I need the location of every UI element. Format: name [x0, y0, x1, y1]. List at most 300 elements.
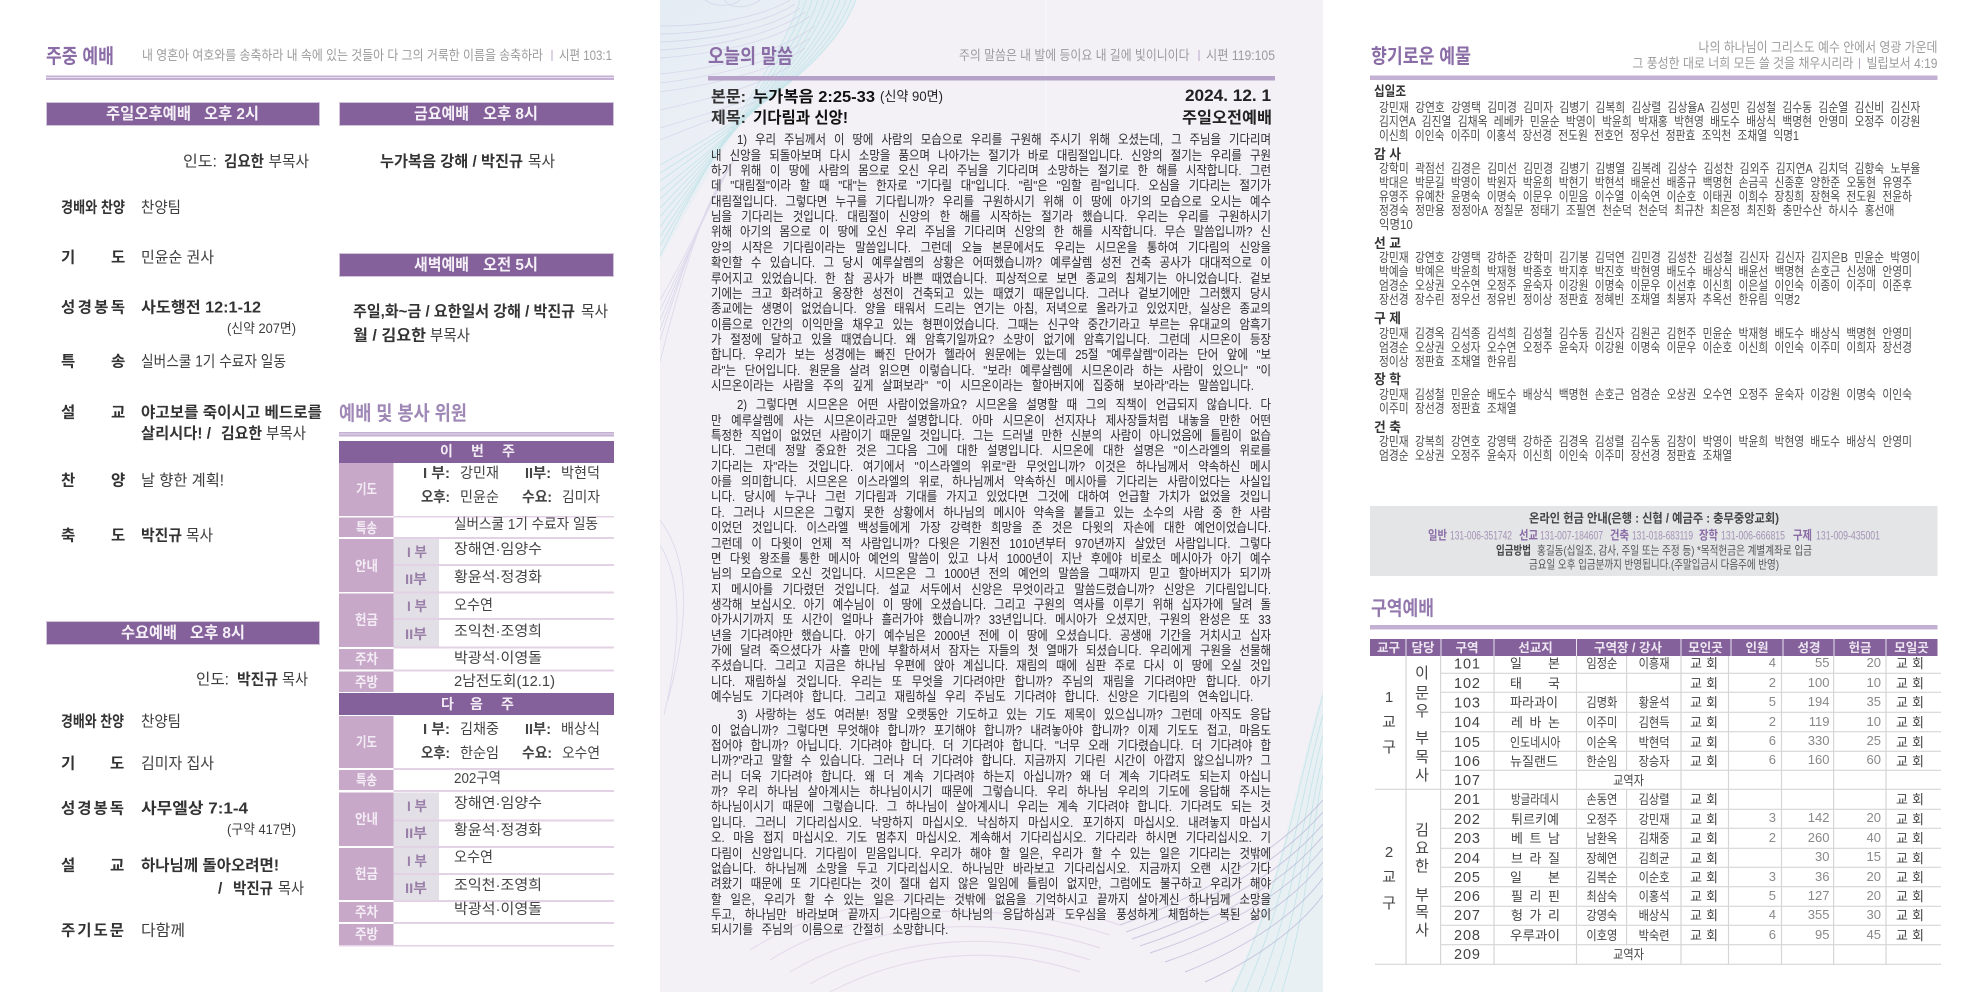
offering list: 선교: 장선경 장수린 정우선 정유빈 정이상 정판효 정혜빈 조채열 최봉자 추옥선 한유림 익명2: [1379, 292, 1800, 307]
bar: 수요예배: 오후 8시: [190, 624, 245, 642]
paragraph 3: 까? 우리 하나님 살아계시는 하나님이시기 때문에 그렇습니다. 우리 하나님 우리의 기도에 응답해 주시는: [711, 784, 1271, 799]
table rows: district 1: 107: [1454, 773, 1480, 789]
table rows: district 2: 206: [1454, 889, 1480, 905]
callout: online offering accounts: 온라인 헌금 안내(은행 : 신협 / 예금주 : 충무중앙교회): [1529, 510, 1779, 526]
table rows: district 2: 교회: [1896, 908, 1924, 923]
table rows: district 1: 이흥재: [1639, 656, 1670, 671]
bar: 새벽예배: 오전 5시: [483, 256, 538, 274]
bar: 금요예배: 금요예배: [414, 105, 469, 123]
offering list: 십일조: [1374, 84, 1920, 143]
paragraph 3: [711, 707, 1271, 937]
dawn service speakers: 목사: [581, 303, 608, 321]
table header: 모일곳: [1894, 641, 1929, 655]
table rows: district 1: 106: [1454, 754, 1480, 770]
table: this week's volunteers: 주: [502, 443, 515, 459]
sunday afternoon order of service: 야고보를 죽이시고 베드로를: [141, 404, 322, 422]
heading: 향기로운 예물: 나의 하나님이 그리스도 예수 안에서 영광 가운데: [1698, 40, 1938, 55]
table rows: district 2: 장혜연: [1586, 851, 1617, 866]
paragraph 2: 예수님도 기다려야 합니다. 그리고 재림하실 우리 주님도 기다려야 합니다. 신앙은 기다림의 연속입니다.: [711, 689, 1253, 704]
table rows: district 2: 203: [1454, 831, 1480, 847]
table rows: district 2: 127: [1808, 888, 1830, 903]
paragraph 1: 가 절정에 달하고 있을 때였습니다. 왜 암흑기일까요? 소망이 없기에 암흑기입니다. 그런데 시므온이 등장: [711, 332, 1271, 347]
wednesday order of service: 사무엘상 7:1-4: [141, 800, 248, 818]
sunday afternoon order of service: 축: [61, 527, 75, 545]
table: this week's volunteers: I 부:: [423, 465, 450, 482]
wednesday order of service: 설: [61, 857, 75, 875]
table: next week's volunteers: II부: [405, 825, 427, 841]
paragraph 1: 종교에는 생명이 없었습니다. 양을 태워서 드리는 연기는 아침, 저녁으로 올라가고 있었지만, 실상은 종교의: [711, 301, 1271, 316]
heading: 예배 및 봉사 위원: 예배 및 봉사 위원: [339, 402, 467, 425]
callout: online offering accounts: [1370, 506, 1938, 576]
table: next week's volunteers: 오수연: [562, 745, 600, 762]
paragraph 3: 다림이 신앙입니다. 기다림이 믿음입니다. 우리가 해야 할 일은, 우리가 할 수 있는 일은 기다리는 것밖에: [711, 846, 1271, 861]
table rows: district 1: 교회: [1896, 754, 1924, 769]
table rows: district 2: 강민재: [1639, 812, 1670, 827]
table rows: district 2: 오정주: [1586, 812, 1617, 827]
table: next week's volunteers: 오수연: [454, 849, 493, 866]
friday service speaker: 누가복음 강해 / 박진규: [380, 153, 523, 171]
paragraph 2: 이었던 것입니다. 이스라엘 백성들에게 가장 강력한 희망을 준 것은 다윗의 자손에 대한 예언이었습니다.: [711, 520, 1271, 535]
sunday afternoon order of service: 김요한: [224, 153, 264, 171]
table rows: district 2: 95: [1815, 927, 1830, 942]
bar: 주일오후예배: [46, 102, 320, 126]
table rows: district 1: 100: [1808, 675, 1830, 690]
wednesday order of service: 성경봉독: [61, 800, 124, 818]
table rows: district 1: 6: [1769, 733, 1776, 748]
table: this week's volunteers: 기도: [356, 481, 377, 497]
table rows: district 2: [1454, 792, 1924, 963]
table rows: district 2: 3: [1769, 869, 1776, 884]
paragraph 1: 기에는 크고 화려하고 웅장한 성전이 건축되고 있는 때였기 때문입니다. 그러나 겉보기에만 그러했지 당시: [711, 286, 1271, 301]
table rows: district 1: 10: [1867, 675, 1881, 690]
table: next week's volunteers: 조익천·조영희: [454, 877, 542, 894]
table rows: district 1: 35: [1867, 694, 1881, 709]
table: this week's volunteers: 오후:: [421, 489, 450, 506]
table rows: district 1: 교회: [1896, 656, 1924, 671]
wednesday order of service: 다함께: [141, 922, 185, 940]
table: this week's volunteers: 강민재: [460, 465, 499, 482]
table rows: district 2: 교회: [1690, 812, 1718, 827]
paragraph 1: 대림절입니다. 그렇다면 누구를 기다립니까? 우리를 구원하시기 위해 이 땅에 아기의 모습으로 오시는 예수: [711, 194, 1271, 209]
table: this week's volunteers: 조익천·조영희: [454, 623, 542, 640]
table rows: district 2: 튀르키예: [1511, 812, 1559, 827]
callout: online offering accounts: 입금방법: [1496, 544, 1531, 558]
offering list: 선교: [1374, 236, 1920, 307]
table: next week's volunteers: I 부:: [423, 721, 450, 738]
offering list: 십일조: 이신희 이인숙 이주미 이홍석 장선경 전도원 전호언 정우선 정판효 조익천 조채열 익명1: [1379, 128, 1799, 143]
table: this week's volunteers: 박현덕: [561, 465, 600, 482]
heading: 주중 예배: 시편 103:1: [559, 48, 612, 63]
panel: sermon background with swirls: [660, 0, 1323, 992]
callout: online offering accounts: 선교: [1519, 528, 1538, 542]
table rows: district 1: 뉴질랜드: [1510, 754, 1558, 769]
sunday afternoon order of service: 기: [61, 249, 75, 267]
table rows: district 1: 60: [1867, 752, 1881, 767]
sunday afternoon order of service: 실버스쿨 1기 수료자 일동: [141, 353, 286, 371]
offering list: 감사: 정경숙 정만용 정정아A 정칠문 정태기 조필연 천순덕 천순덕 최규찬 최은정 최진화 충만수산 하시수 홍선애: [1379, 203, 1894, 218]
table rows: district 2: 교회: [1690, 908, 1718, 923]
sunday afternoon order of service: 부목사: [268, 153, 309, 171]
table rows: district 2: 15: [1867, 849, 1881, 864]
table: next week's volunteers: I 부: [407, 798, 427, 814]
paragraph 2: 니다. 그런데 정말 중요한 것은 그다음 그에 대한 설명입니다. 시므온에 대한 설명은 "이스라엘의 위로를: [711, 443, 1271, 458]
table rows: district 2: 20: [1867, 810, 1881, 825]
table: next week's volunteers: 202구역: [454, 770, 501, 787]
sunday afternoon order of service: 특: [61, 353, 75, 371]
table rows: district 2: 40: [1867, 830, 1881, 845]
table rows: district 2: 교회: [1896, 831, 1924, 846]
paragraph 2: 아가시기까지 또 시간이 얼마나 흘러가야 했습니까? 33년입니다. 메시아가 오셨지만, 구원의 완성은 또 33: [711, 612, 1271, 627]
paragraph 3: 이 없습니까? 그렇다면 무엇해야 합니까? 포기해야 합니까? 내려놓아야 합니까? 이제 기도도 접고, 마음도: [711, 723, 1271, 738]
sermon title block: 주일오전예배: [1182, 109, 1272, 127]
paragraph 3: 3) 사랑하는 성도 여러분! 정말 오랫동안 기도하고 있는 기도 제목이 있으십니까? 그런데 아직도 응답: [737, 707, 1271, 722]
paragraph 1: 내 신앙을 되돌아보며 다시 소망을 품으며 나아가는 절기가 바로 대림절입니다. 신앙의 절기는 우리를 구원: [711, 148, 1271, 163]
table: this week's volunteers: I 부: [407, 544, 427, 560]
table rows: district 1: 102: [1454, 676, 1480, 692]
paragraph 1: 1) 우리 주님께서 이 땅에 사람의 모습으로 우리를 구원해 주시기 위해 오셨는데, 그 주님을 기다리며: [737, 132, 1271, 147]
offering list: 선교: 선 교: [1374, 236, 1401, 251]
wednesday order of service: 목사: [278, 880, 304, 898]
paragraph 2: 아를 의미합니다. 시므온은 이스라엘의 위로, 하나님께서 약속하신 메시아를 기다리는 사람이었다는 사실입: [711, 474, 1271, 489]
table rows: district 1: 김명화: [1586, 695, 1617, 710]
merged cell: 김요한 부목사: 김: [1415, 822, 1429, 839]
table rows: district 1: 194: [1808, 694, 1830, 709]
heading: 향기로운 예물: 향기로운 예물: [1371, 45, 1471, 68]
heading: 오늘의 말씀: 주의 말씀은 내 발에 등이요 내 길에 빛이니이다: [959, 48, 1190, 63]
wednesday order of service: 목사: [282, 671, 308, 689]
merged cell: 이문우 부목사: 사: [1415, 767, 1429, 784]
callout: online offering accounts: 금요일 오후 입금분까지 반영됩니다.(주말입금시 다음주에 반영): [1529, 558, 1779, 572]
paragraph 3: 입니다. 그러니 기다리십시오. 낙망하지 마십시오. 낙심하지 마십시오. 포기하지 마십시오. 내려놓지 마십시: [711, 815, 1271, 830]
table: next week's volunteers: 배상식: [561, 721, 600, 738]
table rows: district 2: 교회: [1690, 831, 1718, 846]
callout: online offering accounts: 건축: [1610, 528, 1629, 542]
table rows: district 2: 36: [1815, 869, 1830, 884]
table rows: district 2: 2: [1769, 830, 1776, 845]
paragraph 2: 만 예루살렘에 사는 시므온이라고만 설명합니다. 아마 시므온이 선지자나 제사장들처럼 내놓을 만한 어떤: [711, 413, 1271, 428]
table rows: district 2: 교회: [1690, 792, 1718, 807]
sunday afternoon order of service: 경배와 찬양: [61, 199, 125, 217]
wednesday order of service: 찬양팀: [141, 713, 181, 731]
table rows: district 2: 142: [1808, 810, 1830, 825]
merged cell: 이문우 부목사: [1415, 665, 1429, 784]
wednesday order of service: 박진규: [233, 880, 273, 898]
table rows: district 1: 160: [1808, 752, 1830, 767]
table: next week's volunteers: [339, 693, 614, 946]
table rows: district 2: 교회: [1896, 928, 1924, 943]
table rows: district 1: 교회: [1690, 754, 1718, 769]
table rows: district 1: 교회: [1690, 676, 1718, 691]
paragraph 3: 니까?"라고 말할 수 있습니다. 그러나 더 기다려야 합니다. 지금까지 기다린 시간이 아깝지 않으십니까? 그: [711, 753, 1271, 768]
paragraph 2: 생각해 보십시오. 아기 예수님이 이 땅에 오셨습니다. 그리고 구원의 역사를 이루기 위해 십자가에 달려 돌: [711, 597, 1271, 612]
paragraph 2: 년을 기다려야만 했습니다. 아기 예수님은 2000년 전에 이 땅에 오셨습니다. 공생애 기간을 거치시고 십자: [711, 628, 1271, 643]
table rows: district 1: 일본: [1510, 656, 1560, 671]
sunday afternoon order of service: 김요한: [221, 425, 262, 443]
table rows: district 2: 남환옥: [1586, 831, 1617, 846]
table: this week's volunteers: 오수연: [454, 597, 493, 614]
table: next week's volunteers: 주차: [355, 904, 378, 920]
bar: 수요예배: 수요예배: [121, 624, 177, 642]
sunday afternoon order of service: 사도행전 12:1-12: [141, 299, 261, 317]
table header: 성경: [1797, 641, 1821, 655]
table rows: district 2: 30: [1867, 907, 1881, 922]
paragraph 3: 러니 더욱 기다려야 합니다. 왜 더 계속 기다려야 하는지 아십니까? 왜 더 계속 기다려도 되는지 아십니: [711, 769, 1271, 784]
paragraph 1: 하기 위해 이 땅에 사람의 몸으로 오신 우리 주님을 기다리며 소망하는 절기로 한 해를 시작합니다. 그런: [711, 163, 1271, 178]
paragraph 2: 지 메시아를 기다렸던 것입니다. 설교 서두에서 신앙은 무엇이라고 말씀드렸습니까? 신앙은 기다림입니다.: [711, 582, 1271, 597]
table rows: district 2: 김희균: [1639, 851, 1670, 866]
sunday afternoon order of service: 교: [111, 405, 125, 422]
merged cell: 김요한 부목사: 사: [1415, 922, 1429, 939]
table header: 구역장 / 강사: [1594, 641, 1662, 655]
table: this week's volunteers: 주방: [355, 674, 378, 690]
paragraph 1: 앙의 시작은 기다림이라는 말씀입니다. 그런데 오늘 본문에서도 우리는 시므온을 통하여 기다림의 신앙을: [711, 240, 1271, 255]
table rows: district 2: 204: [1454, 851, 1480, 867]
table: this week's volunteers: II부: [405, 626, 427, 642]
sunday afternoon order of service: 날 향한 계획!: [141, 472, 224, 490]
table grid: [1375, 656, 1941, 964]
table rows: district 1: 황윤석: [1639, 695, 1670, 710]
sunday afternoon order of service: (신약 207면): [227, 321, 296, 336]
heading: 향기로운 예물: 빌립보서 4:19: [1866, 56, 1938, 71]
heading: 향기로운 예물: 그 풍성한 대로 너희 모든 쓸 것을 채우시리라: [1632, 56, 1854, 71]
paragraph 1: 루어지고 있었습니다. 한 참 공사가 바쁜 때였습니다. 피상적으로 보면 종교의 침체기는 아니었습니다. 겉보: [711, 271, 1271, 286]
table header: 모인곳: [1688, 641, 1723, 655]
callout: online offering accounts: 131-007-184607: [1540, 528, 1603, 542]
offering list: 장학: 이주미 장선경 정판효 조채열: [1379, 401, 1517, 416]
sermon title block: 누가복음 2:25-33: [753, 88, 875, 106]
sunday afternoon order of service: 설: [61, 404, 75, 422]
table rows: district 2: 배상식: [1639, 908, 1670, 923]
table rows: district 2: 355: [1808, 907, 1830, 922]
heading: 주중 예배: 주중 예배: [46, 45, 114, 68]
table rows: district 2: 4: [1769, 907, 1776, 922]
table rows: district 2: 이홍석: [1639, 889, 1670, 904]
table rows: district 1: 임정순: [1586, 656, 1617, 671]
paragraph 2: 그런데 이 다윗이 언제 적 사람입니까? 다윗은 기원전 1010년부터 970년까지 살았던 사람입니다. 그렇다: [711, 536, 1271, 551]
wednesday order of service: 박진규: [237, 671, 278, 689]
table rows: district 1: 6: [1769, 752, 1776, 767]
heading: 구역예배: [1370, 597, 1938, 630]
paragraph 3: 오. 마음 접지 마십시오. 기도 멈추지 마십시오. 계속해서 기다리십시오. 기다리라 하시면 기다리십시오. 기: [711, 830, 1271, 845]
sermon title block: 기다림과 신앙!: [753, 109, 848, 127]
friday service speaker: 목사: [528, 153, 555, 171]
heading: 오늘의 말씀: 시편 119:105: [1206, 48, 1275, 63]
table rows: district 1: 4: [1769, 655, 1776, 670]
sunday afternoon order of service: 찬: [61, 472, 75, 490]
table header: [1370, 639, 1938, 656]
table rows: district 2: 베트남: [1511, 831, 1560, 846]
table rows: district 1: 인도네시아: [1510, 735, 1561, 750]
table rows: district 2: 교회: [1690, 851, 1718, 866]
paragraph 1: 확인할 수 있습니다. 그 당시 예루살렘의 상황은 어떠했습니까? 예루살렘 성전 건축 공사가 대대적으로 이: [711, 255, 1271, 270]
table: next week's volunteers: 박광석·이영돌: [454, 901, 542, 918]
dawn service speakers: 월 / 김요한: [353, 327, 426, 345]
table: this week's volunteers: 2남전도회(12.1): [454, 673, 555, 690]
table rows: district 1: 119: [1809, 714, 1830, 729]
table rows: district 2: 강영숙: [1586, 908, 1617, 923]
table rows: district 1: 교회: [1896, 715, 1924, 730]
table: this week's volunteers: 장해연·임양수: [454, 541, 542, 558]
heading: 구역예배: 구역예배: [1371, 597, 1434, 620]
table rows: district 1: 레바논: [1511, 715, 1560, 730]
sunday afternoon order of service: 성경봉독: [61, 299, 125, 317]
table rows: district 2: 260: [1808, 830, 1830, 845]
table: this week's volunteers: 주차: [355, 651, 378, 667]
table rows: district 1: 교회: [1690, 656, 1718, 671]
callout: online offering accounts: 131-006-666815: [1721, 528, 1785, 542]
paragraph 1: 위해 아기의 몸으로 이 땅에 오신 우리 주님을 기다리며 신앙의 한 해를 시작합니다. 무슨 말씀입니까? 신: [711, 224, 1271, 239]
paragraph 3: 할 일은, 우리가 할 수 있는 일은 기다리는 것밖에 없음을 기억하시고 끝까지 살아계신 하나님께 소망을: [711, 892, 1271, 907]
paragraph 2: 주셨습니다. 그리고 지금은 하나님 우편에 앉아 계십니다. 재림의 때에 심판 주로 다시 이 땅에 오실 것입: [711, 658, 1271, 673]
sermon title block: 본문:: [711, 88, 746, 106]
table: this week's volunteers: 특송: [356, 520, 377, 536]
table rows: district 2: 30: [1815, 849, 1830, 864]
table rows: district 2: 헝가리: [1511, 908, 1560, 923]
sunday afternoon order of service: 양: [111, 472, 125, 490]
table header: 헌금: [1848, 640, 1872, 655]
table rows: district 2: 김상렬: [1639, 792, 1670, 807]
offering list: 십일조: 십일조: [1374, 84, 1406, 99]
table: this week's volunteers: II부:: [525, 465, 551, 482]
sermon title block: (신약 90면): [880, 89, 943, 104]
offering list: 감사: [1374, 147, 1920, 232]
offering list: 장학: 장 학: [1374, 372, 1402, 387]
merged cell: 김요한 부목사: 한: [1415, 858, 1429, 875]
table rows: district 2: 방글라데시: [1511, 792, 1559, 807]
bar: 금요예배: 오후 8시: [483, 105, 538, 123]
merged cell: 이문우 부목사: 이: [1415, 665, 1429, 682]
paragraph 3: 두고, 하나님만 바라보며 끝까지 기다림으로 하나님의 응답하심과 도우심을 풍성하게 체험하는 복된 삶이: [711, 907, 1271, 922]
table rows: district 1: 파라과이: [1510, 695, 1558, 710]
table: this week's volunteers: II부: [405, 571, 427, 587]
offering list: 구제: 구 제: [1374, 311, 1401, 326]
table rows: district 1: 이순옥: [1586, 735, 1617, 750]
paragraph 3: 접어야 합니까? 아닙니다. 기다려야 합니다. 더 기다려야 합니다. "너무 오래 기다렸습니다. 더 기다려야 합: [711, 738, 1271, 753]
sunday afternoon order of service: 박진규: [141, 527, 182, 545]
table: next week's volunteers: 장해연·임양수: [454, 795, 542, 812]
table rows: district 2: 20: [1867, 869, 1881, 884]
table rows: district 1: 330: [1808, 733, 1830, 748]
wednesday order of service: 경배와 찬양: [61, 713, 124, 731]
table rows: district 2: 이호영: [1586, 928, 1617, 943]
table: this week's volunteers: 실버스쿨 1기 수료자 일동: [454, 516, 598, 533]
paragraph 2: 니다. 당시에 누구나 그런 기다림과 기대를 가지고 있었다면 그것에 대하여 언급할 가치가 없었을 것입니: [711, 489, 1271, 504]
sunday afternoon order of service: 민윤순 권사: [141, 249, 214, 267]
table rows: district 2: 교회: [1896, 870, 1924, 885]
table rows: district 1: 박현덕: [1639, 735, 1670, 750]
table rows: district 2: 205: [1454, 870, 1480, 886]
merged cell: 이문우 부목사: 문: [1415, 685, 1429, 702]
table rows: district 2: 교회: [1690, 870, 1718, 885]
panel: today's sermon: [708, 0, 1281, 992]
table: next week's volunteers: 기도: [356, 734, 377, 750]
table: next week's volunteers: 다: [441, 696, 454, 712]
table rows: district 1: 한순임: [1586, 754, 1617, 769]
paragraph 3: 하나님이시기 때문에 그렇습니다. 그 하나님이 살아계시니 우리는 계속 기다려야 합니다. 기다려도 되는 것: [711, 799, 1271, 814]
table rows: district 1: 2: [1769, 675, 1776, 690]
sunday afternoon order of service: 도: [111, 528, 125, 545]
table: next week's volunteers: 한순임: [460, 745, 499, 762]
panel: worship services: [46, 45, 614, 946]
table header: 인원: [1745, 641, 1769, 655]
wednesday order of service: 교: [110, 858, 124, 875]
bar: 새벽예배: 새벽예배: [414, 256, 469, 274]
table: this week's volunteers: 이: [440, 443, 453, 459]
table rows: district 2: 209: [1454, 947, 1480, 963]
sunday afternoon order of service: 찬양팀: [141, 199, 181, 217]
paragraph 3: 려왔기 때문에 또 기다린다는 것이 절대 쉽지 않은 일임에 틀림이 없지만, 그럼에도 불구하고 우리가 해야: [711, 876, 1271, 891]
merged cell: 김요한 부목사: 목: [1415, 904, 1429, 921]
table: this week's volunteers: 번: [471, 443, 484, 459]
table rows: district 1: 교회: [1690, 695, 1718, 710]
table rows: district 1: 김현득: [1639, 715, 1670, 730]
table: next week's volunteers: 특송: [356, 772, 377, 788]
table: next week's volunteers: 주방: [355, 926, 378, 942]
merged cell: 1교구: 교: [1382, 714, 1396, 731]
dawn service speakers: 부목사: [430, 327, 470, 345]
table: this week's volunteers: 박광석·이영돌: [454, 650, 542, 667]
table rows: district 1: 교역자: [1613, 773, 1644, 788]
callout: online offering accounts: 131-006-351742: [1450, 528, 1512, 542]
table rows: district 2: 일본: [1510, 870, 1560, 885]
callout: online offering accounts: 홍길동(십일조, 감사, 주일 또는 주정 등) *목적헌금은 계별계좌로 입금: [1537, 544, 1812, 558]
table rows: district 2: 45: [1867, 927, 1881, 942]
merged cell: 이문우 부목사: 목: [1415, 749, 1429, 766]
wednesday order of service: 인도:: [196, 671, 229, 689]
paragraph 2: 2) 그렇다면 시므온은 어떤 사람이었을까요? 시므온을 설명할 때 그의 직책이 언급되지 않습니다. 다: [737, 397, 1271, 412]
heading: 오늘의 말씀: [708, 45, 1275, 80]
table rows: district 2: 박숙련: [1639, 928, 1670, 943]
sermon body text: [711, 0, 1281, 992]
wednesday order of service: [61, 671, 308, 940]
table rows: district 1: 25: [1867, 733, 1881, 748]
wednesday order of service: (구약 417면): [227, 822, 296, 837]
wednesday order of service: 도: [110, 756, 124, 773]
table rows: district 1: 101: [1454, 656, 1480, 672]
table: this week's volunteers: 안내: [355, 558, 378, 574]
offering list: 구제: [1374, 311, 1912, 369]
table rows: district 2: 우루과이: [1510, 928, 1560, 943]
sermon title block: [711, 86, 1272, 127]
table rows: district 1: 이주미: [1586, 715, 1617, 730]
table: next week's volunteers: 음: [470, 696, 483, 712]
table: next week's volunteers: 김채중: [460, 721, 499, 738]
paragraph 1: 합니다. 우리가 보는 성경에는 빠진 단어가 헬라어 원문에는 있는데 25절 "예루살렘"이라는 단어 앞에 "보: [711, 347, 1271, 362]
table: next week's volunteers: II부: [405, 880, 427, 896]
wednesday order of service: /: [218, 881, 223, 898]
bar: 주일오후예배: 주일오후예배: [106, 105, 191, 123]
table rows: district 2: 208: [1454, 928, 1480, 944]
table rows: district 2: 김복순: [1586, 870, 1617, 885]
table: this week's volunteers: 민윤순: [460, 489, 499, 506]
table rows: district 2: 최삼숙: [1586, 889, 1617, 904]
sunday afternoon order of service: 부목사: [266, 425, 306, 443]
table: this week's volunteers: 김미자: [562, 489, 600, 506]
bar: 금요예배: [340, 102, 614, 126]
table rows: district 2: 교회: [1896, 812, 1924, 827]
table: next week's volunteers: 수요:: [522, 745, 552, 762]
table: next week's volunteers: 황윤석·정경화: [454, 822, 542, 839]
table rows: district 1: 104: [1454, 715, 1480, 731]
sunday afternoon order of service: 살리시다! /: [141, 425, 212, 443]
sunday afternoon order of service: [61, 153, 322, 545]
heading: 주중 예배: 내 영혼아 여호와를 송축하라 내 속에 있는 것들아 다 그의 거룩한 이름을 송축하라: [142, 48, 544, 63]
callout: online offering accounts: 일반: [1428, 528, 1447, 542]
wednesday order of service: 기: [61, 755, 75, 773]
table rows: district 2: 3: [1769, 810, 1776, 825]
table: this week's volunteers: I 부: [407, 598, 427, 614]
table: district worship: [1370, 639, 1941, 964]
